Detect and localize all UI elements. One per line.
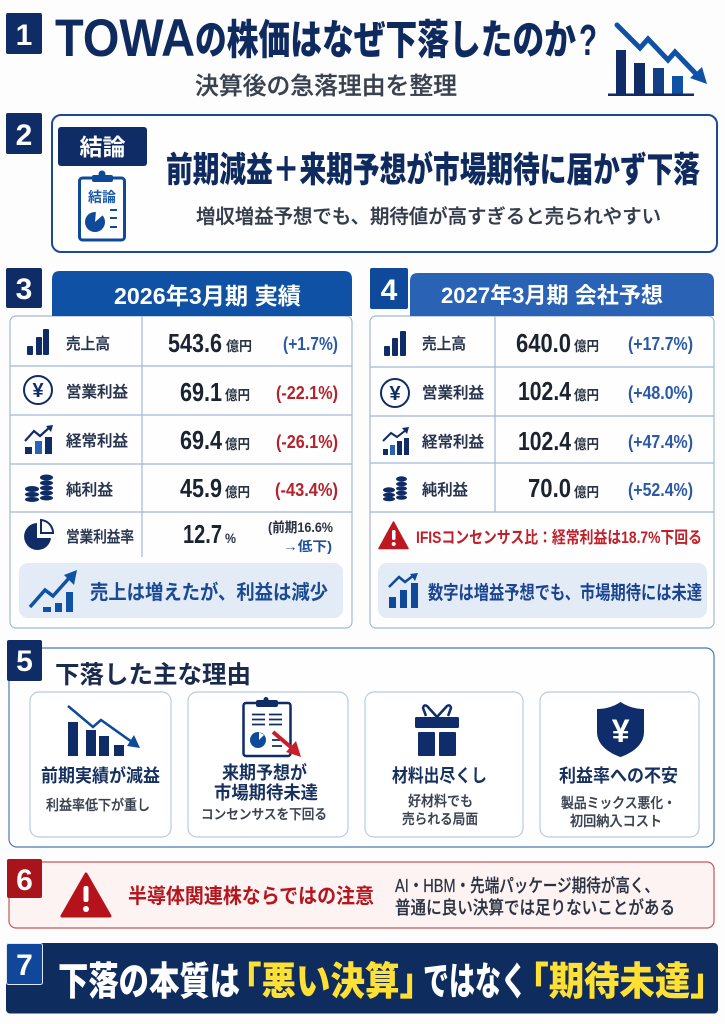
icon: bars: [384, 331, 406, 356]
panel header: 2027年3月期 会社予想: [441, 283, 663, 308]
row: operating margin: 営業利益率: [66, 528, 134, 546]
table grid: [370, 316, 714, 512]
card 3: 好材料でも: [408, 793, 473, 809]
row: ordinary profit: [383, 426, 693, 456]
section 6: semiconductor caution: [7, 859, 714, 928]
reasons panel: [9, 648, 714, 847]
badge 1: [6, 13, 42, 54]
row: ordinary profit: (-26.1%): [276, 432, 338, 452]
row: sales: 億円: [226, 338, 252, 354]
icon: coins: [25, 474, 53, 502]
banner message: 下落の本質は: [58, 961, 240, 1004]
row: sales: (+1.7%): [283, 334, 338, 354]
panel header: 2026年3月期 実績: [114, 283, 301, 309]
row: sales: 億円: [574, 338, 599, 354]
badge 2: 2: [16, 119, 32, 152]
row: sales: 543.6: [168, 328, 222, 358]
card 4: [540, 692, 699, 837]
badge 2: [6, 113, 42, 154]
card 1: [30, 692, 171, 837]
card 3: [365, 692, 523, 837]
row: net profit: [383, 473, 693, 503]
card 4: 利益率への不安: [559, 766, 678, 786]
icon: clipboard: 結論: [88, 189, 116, 205]
row: operating profit: 営業利益: [422, 384, 484, 402]
row: ordinary profit: 億円: [225, 436, 250, 452]
card 3: 材料出尽くし: [392, 766, 487, 786]
row: ordinary profit: 億円: [574, 436, 599, 452]
row: sales: 売上高: [66, 335, 110, 353]
icon: clipboard: [80, 170, 124, 240]
row: sales: [384, 328, 693, 358]
badge 6: 6: [16, 864, 33, 897]
banner message: 「悪い決算」: [227, 961, 434, 1004]
row: net profit: 70.0: [528, 473, 571, 503]
banner background: [6, 943, 718, 1014]
icon: rising arrow: [30, 570, 77, 612]
badge 6: [7, 859, 42, 898]
banner message: [58, 961, 725, 1004]
conclusion subtext: 増収増益予想でも、期待値が高すぎると売られやすい: [196, 206, 661, 228]
row: operating profit: (+48.0%): [628, 383, 693, 403]
icon: yen shield: ¥: [612, 713, 630, 749]
title: [55, 9, 597, 68]
icon: pie chart: [24, 520, 53, 550]
row: ordinary profit: 経常利益: [422, 433, 484, 451]
panel header: [52, 271, 352, 316]
conclusion label: 結論: [80, 134, 126, 160]
title: TOWA: [55, 9, 195, 68]
icon: growth chart: [25, 425, 53, 454]
conclusion panel: [52, 115, 717, 252]
row: operating margin: %: [225, 530, 236, 546]
icon: gift box: [415, 705, 459, 756]
row: ordinary profit: 102.4: [518, 426, 571, 456]
caution body: AI・HBM・先端パッケージ期待が高く、: [395, 875, 659, 896]
row: ordinary profit: [25, 425, 338, 455]
table grid: [10, 316, 352, 557]
badge 5: [7, 640, 42, 681]
icon: bars: [27, 329, 49, 355]
row: operating profit: [381, 376, 693, 407]
callout: below market expectations: [378, 563, 707, 618]
row: operating margin: (前期16.6%: [268, 519, 333, 535]
section 4: FY2027 forecast: [370, 268, 714, 628]
card 2: [188, 692, 348, 837]
badge 4: 4: [381, 274, 398, 307]
card 4: 初回納入コスト: [570, 813, 662, 829]
row: net profit: [25, 473, 338, 503]
card 2: 来期予想が: [222, 762, 307, 783]
row: operating profit: 102.4: [518, 376, 571, 406]
badge 5: 5: [16, 645, 33, 678]
row: operating margin: [24, 519, 333, 554]
caution body: 普通に良い決算では足りないことがある: [395, 897, 675, 918]
icon: yen coin: [24, 376, 52, 404]
row: operating profit: (-22.1%): [276, 383, 338, 403]
icon: warning triangle: [62, 874, 110, 916]
row: ordinary profit: 69.4: [180, 425, 222, 455]
card 2: コンセンサスを下回る: [201, 807, 327, 822]
badge 7: 7: [16, 949, 33, 982]
section 3: FY2026 results: [6, 268, 352, 628]
badge 1: 1: [16, 19, 32, 52]
row: operating margin: 12.7: [183, 519, 222, 549]
section 1: title area: [6, 9, 707, 100]
row: net profit: 45.9: [180, 473, 222, 503]
heading: 下落した主な理由: [55, 661, 251, 689]
icon: rising chart: [389, 573, 418, 608]
icon: yen shield: [597, 702, 644, 757]
row: net profit: (-43.4%): [275, 480, 338, 500]
title: の株価はなぜ下落したのか: [195, 17, 576, 63]
row: ordinary profit: (+47.4%): [628, 432, 693, 452]
caution heading: 半導体関連株ならではの注意: [128, 884, 374, 908]
row: operating profit: 億円: [574, 387, 599, 403]
icon: yen coin: ¥: [389, 383, 401, 405]
panel frame: [370, 316, 714, 628]
badge 3: 3: [16, 273, 32, 306]
callout: sales up profit down: [19, 563, 343, 618]
card 1: 前期実績が減益: [41, 765, 160, 786]
icon: yen coin: [381, 379, 409, 407]
panel header: [410, 273, 714, 316]
caution panel: [9, 862, 714, 928]
conclusion label: [58, 127, 147, 166]
row: net profit: 純利益: [66, 481, 113, 499]
row: sales: 売上高: [422, 335, 466, 353]
title: ?: [579, 16, 597, 65]
badge 3: [6, 268, 42, 308]
icon: clipboard with red arrow: [244, 697, 301, 757]
icon: growth chart: [383, 427, 409, 455]
row: sales: (+17.7%): [628, 334, 693, 354]
row: operating margin: →低下): [283, 539, 332, 554]
panel frame: [10, 316, 352, 628]
icon: falling bar chart: [608, 25, 707, 96]
row: operating profit: [24, 376, 338, 407]
section 7: bottom banner: [6, 943, 725, 1014]
banner message: ではなく: [423, 961, 527, 1004]
row: operating profit: 営業利益: [66, 383, 128, 401]
row: ordinary profit: 経常利益: [66, 432, 128, 450]
icon: coins: [383, 476, 407, 501]
card 2: 市場期待未達: [214, 783, 318, 803]
icon: yen coin: ¥: [32, 380, 44, 402]
row: net profit: 純利益: [422, 481, 468, 499]
card 1: 利益率低下が重し: [46, 797, 150, 813]
badge 4: [370, 268, 408, 309]
row: operating profit: 億円: [225, 387, 250, 403]
row: sales: 640.0: [516, 328, 571, 358]
card 3: 売られる局面: [402, 811, 478, 827]
icon: warning triangle: [379, 522, 408, 548]
callout: sales up profit down: 売上は増えたが、利益は減少: [90, 580, 328, 604]
section 5: main reasons: [7, 640, 714, 847]
row: net profit: 億円: [225, 484, 250, 500]
section 2: conclusion: [6, 113, 717, 252]
icon: falling bars: [68, 706, 140, 756]
row: net profit: 億円: [574, 484, 599, 500]
card 4: 製品ミックス悪化・: [561, 795, 676, 811]
subtitle: 決算後の急落理由を整理: [195, 73, 457, 100]
row: net profit: (+52.4%): [628, 480, 693, 500]
row: operating profit: 69.1: [180, 377, 222, 407]
badge 7: [6, 944, 42, 984]
caution body: [395, 875, 675, 918]
warning: IFIS consensus: [379, 522, 702, 548]
row: sales: [27, 328, 338, 358]
